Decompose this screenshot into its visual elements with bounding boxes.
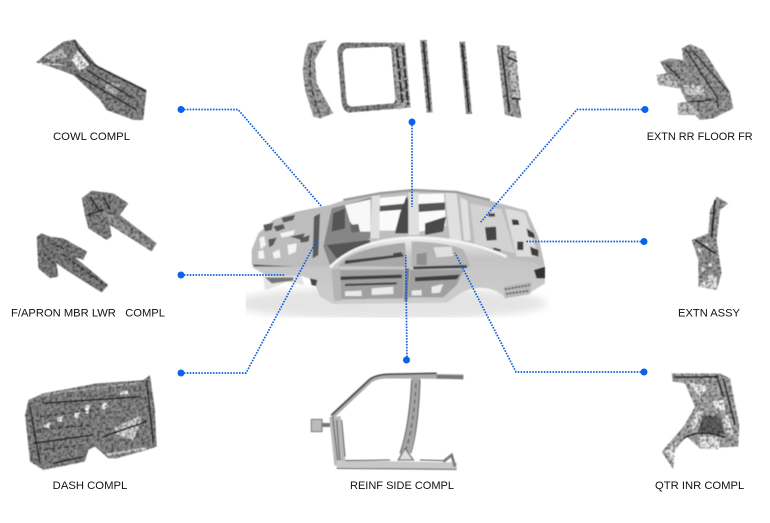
part: extension assembly: [692, 197, 728, 290]
front subframe: [263, 276, 304, 290]
near-side window openings: [338, 243, 407, 267]
part: cowl: [36, 39, 147, 120]
part: quarter inner: [662, 373, 739, 469]
connector: dash: [178, 238, 318, 376]
connector: side reinforcement: [403, 255, 410, 364]
upper cage: [252, 191, 545, 270]
label: dash: DASH COMPL: [53, 480, 127, 492]
label: side reinforcement: REINF SIDE COMPL: [350, 480, 454, 492]
connector: rear floor extension: [480, 106, 648, 223]
far-side cabin: [323, 197, 372, 265]
rear end: [534, 267, 545, 278]
connector: extension assembly: [525, 238, 648, 245]
connector: roof panels: [408, 118, 416, 207]
connector: quarter inner: [455, 253, 648, 376]
car shadow: [246, 286, 546, 318]
front structure holes: [258, 230, 297, 259]
connector: front apron: [178, 272, 285, 278]
connector: cowl: [178, 106, 322, 207]
part: roof and pillar panels: [303, 40, 522, 118]
part: rear floor extension: [657, 44, 733, 120]
label: extension assembly: EXTN ASSY: [678, 308, 741, 320]
part: dash panel: [25, 375, 157, 470]
label: quarter inner: QTR INR COMPL: [655, 480, 744, 492]
near-side door openings: [337, 269, 405, 299]
label: front apron: F/APRON MBR LWR COMPL: [11, 308, 165, 320]
label: rear floor extension: EXTN RR FLOOR FR: [647, 131, 753, 143]
near-side body shell: [252, 238, 545, 304]
car body in white: [233, 190, 547, 320]
rear panel: [470, 203, 515, 253]
part: side reinforcement: [311, 373, 463, 469]
part: front apron members: [37, 191, 157, 293]
label: cowl: COWL COMPL: [53, 131, 130, 143]
